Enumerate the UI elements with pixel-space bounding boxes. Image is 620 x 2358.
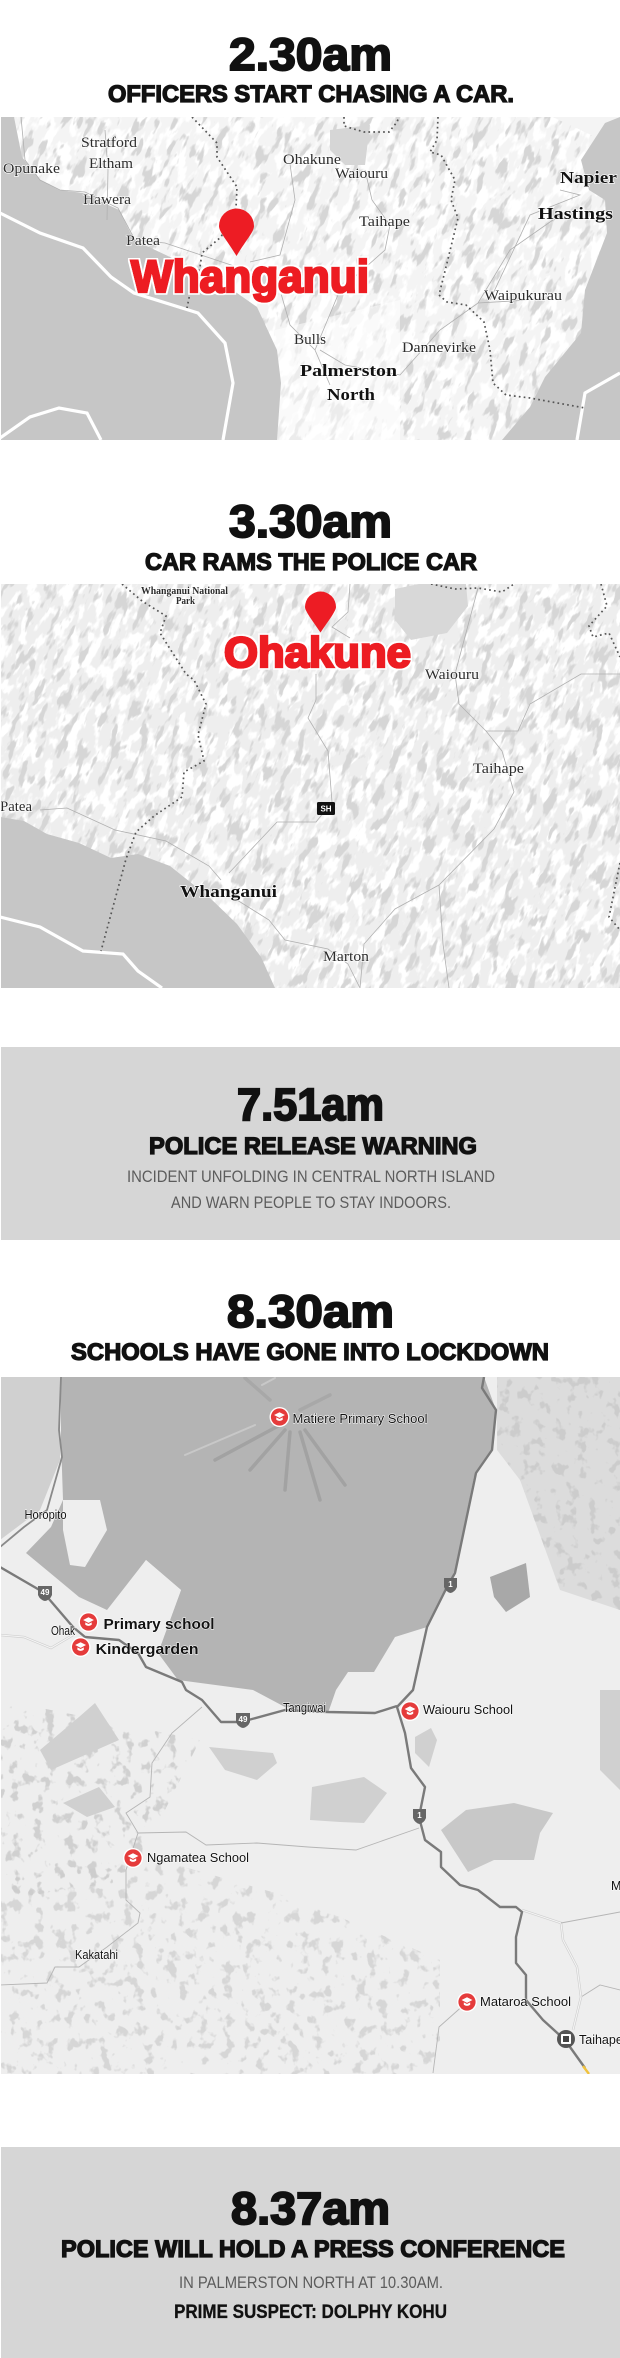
highway shields: 1 <box>417 1811 422 1820</box>
volcano ridges <box>185 1378 345 1500</box>
heading: 2.30am <box>108 29 514 108</box>
place labels: Patea <box>126 233 160 249</box>
panel: 8.37am press conference <box>1 2147 620 2358</box>
conservation land <box>0 1377 620 1872</box>
place labels: Whanganui National <box>141 586 228 597</box>
red label: Ohakune: Ohakune <box>224 629 411 677</box>
place labels: Patea <box>0 799 32 815</box>
school: Waiouru School <box>400 1701 513 1721</box>
place labels: Tangiwai <box>283 1701 326 1715</box>
school: Kindergarden: Kindergarden <box>96 1641 199 1658</box>
place labels <box>3 135 618 404</box>
body line 2: AND WARN PEOPLE TO STAY INDOORS. <box>171 1193 451 1212</box>
sea <box>0 117 620 440</box>
subtitle: POLICE RELEASE WARNING <box>149 1133 477 1160</box>
school: Mataroa School: Mataroa School <box>480 1995 571 2009</box>
subtitle: SCHOOLS HAVE GONE INTO LOCKDOWN <box>71 1339 549 1366</box>
school: Matiere Primary School <box>270 1407 428 1427</box>
place labels <box>24 1508 620 1962</box>
place labels: Waiouru <box>425 667 480 683</box>
school: Waiouru School: Waiouru School <box>423 1703 513 1717</box>
roads <box>21 117 580 385</box>
subtitle: CAR RAMS THE POLICE CAR <box>145 549 477 576</box>
place labels: Kakatahi <box>75 1948 118 1962</box>
place labels: Park <box>176 596 195 607</box>
panel: map of schools in lockdown <box>0 1377 620 2074</box>
place labels: Taihape <box>359 214 410 230</box>
icon: location pin <box>219 208 254 256</box>
place labels: Waiouru <box>335 166 389 182</box>
place labels: Dannevirke <box>402 340 476 356</box>
town marker: Taihape <box>557 2030 620 2048</box>
place labels: Hastings <box>538 204 613 223</box>
highway shields: 1 <box>448 1580 453 1589</box>
place labels: Whanganui <box>180 882 277 901</box>
place labels: Waipukurau <box>484 288 563 304</box>
panel: map of Ohakune <box>1 584 620 988</box>
school: Ngamatea School: Ngamatea School <box>147 1851 249 1865</box>
body line 1: INCIDENT UNFOLDING IN CENTRAL NORTH ISLAND <box>127 1167 495 1186</box>
place labels: Horopito <box>24 1508 67 1522</box>
school: Mataroa School <box>457 1992 571 2012</box>
time: 7.51am <box>237 1079 384 1130</box>
red label: Whanganui: Whanganui <box>131 251 369 302</box>
sea <box>0 817 275 988</box>
school: Matiere Primary School: Matiere Primary School <box>292 1412 428 1426</box>
highway shields: 49 <box>41 1588 50 1597</box>
borders <box>187 117 585 408</box>
place labels: Eltham <box>89 156 133 172</box>
school: Primary school: Primary school <box>104 1616 214 1633</box>
subtitle: POLICE WILL HOLD A PRESS CONFERENCE <box>61 2236 565 2263</box>
highway marker: SH: SH <box>320 804 332 814</box>
heading: 8.30am <box>71 1286 549 1366</box>
place labels <box>0 586 524 965</box>
borders <box>101 584 620 951</box>
mountain patch <box>395 584 468 640</box>
icon: location pin <box>305 592 336 632</box>
panel: map of Whanganui <box>1 117 620 440</box>
school: Ngamatea School <box>123 1848 249 1868</box>
place labels: Marton <box>323 949 370 965</box>
time: 2.30am <box>229 29 392 80</box>
place labels: Hawera <box>83 192 131 208</box>
school: Kindergarden <box>71 1637 199 1658</box>
time: 3.30am <box>229 496 392 547</box>
highway shields: 49 <box>239 1715 248 1724</box>
school: Primary school <box>78 1612 214 1633</box>
time: 8.30am <box>227 1286 394 1337</box>
highway marker: SH <box>317 802 335 815</box>
prime suspect: PRIME SUSPECT: DOLPHY KOHU <box>174 2302 447 2323</box>
minor roads <box>0 1635 620 2073</box>
place labels: Ohakune <box>283 152 341 168</box>
place labels: Taihape <box>473 761 524 777</box>
mountain patch <box>330 125 370 165</box>
place labels: Ohak <box>51 1624 76 1638</box>
body line: IN PALMERSTON NORTH AT 10.30AM. <box>179 2273 443 2292</box>
highway shields <box>38 1578 457 1824</box>
place labels: Napier <box>560 168 618 187</box>
roads <box>40 584 620 988</box>
highways <box>0 1377 589 2074</box>
place labels: Opunake <box>3 161 60 177</box>
subtitle: OFFICERS START CHASING A CAR. <box>108 81 514 108</box>
place labels: Stratford <box>81 135 138 151</box>
panel: 7.51am police warning <box>1 1047 620 1240</box>
heading: 3.30am <box>145 496 477 576</box>
place labels: Palmerston <box>300 361 398 380</box>
place labels: Bulls <box>294 332 326 348</box>
place labels: North <box>327 385 376 404</box>
time: 8.37am <box>231 2183 390 2234</box>
